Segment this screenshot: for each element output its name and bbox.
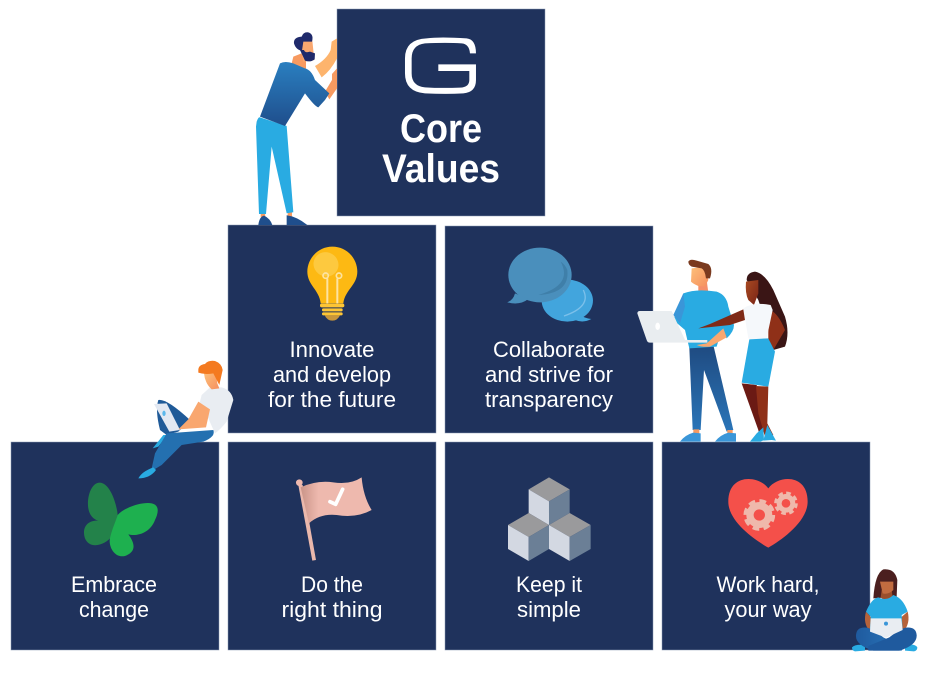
label <box>71 572 157 622</box>
label: Collaborate <box>493 337 605 362</box>
label: and strive for <box>485 362 613 387</box>
icon: cubes <box>508 477 591 561</box>
label: Embrace <box>71 572 157 597</box>
icon: heart with gears <box>728 479 808 548</box>
label: right thing <box>282 597 382 622</box>
panel: Embrace change <box>11 442 219 650</box>
icon: speech bubbles <box>507 248 593 322</box>
icon: G logo <box>405 37 476 94</box>
heading: Core Values: Values <box>382 147 500 191</box>
panel: Core Values <box>337 9 545 216</box>
figure: standing couple with laptop <box>637 260 787 442</box>
panel: Collaborate and strive for transparency <box>445 226 653 433</box>
icon: butterfly <box>84 483 158 556</box>
figure: man pushing block <box>256 32 337 225</box>
label: transparency <box>485 387 614 412</box>
figure: woman sitting cross-legged with laptop <box>852 569 917 651</box>
heading: Core Values <box>382 107 500 191</box>
heading: Core Values: Core <box>400 107 482 151</box>
label: Keep it <box>516 572 583 597</box>
icon: flag with check <box>296 477 372 561</box>
label: for the future <box>268 387 396 412</box>
panel: Do the right thing <box>228 442 436 650</box>
icon: light bulb <box>307 247 357 321</box>
label <box>716 572 820 622</box>
panel: Keep it simple <box>445 442 653 650</box>
label <box>516 572 583 622</box>
panel: Innovate and develop for the future <box>228 225 436 433</box>
label <box>485 337 614 412</box>
label: Innovate <box>290 337 374 362</box>
label: your way <box>724 597 812 622</box>
label: Do the <box>301 572 363 597</box>
label: Work hard, <box>716 572 820 597</box>
label: simple <box>517 597 581 622</box>
figure: man sitting with laptop <box>138 361 233 478</box>
label <box>268 337 396 412</box>
label: and develop <box>273 362 391 387</box>
label: change <box>79 597 149 622</box>
panel: Work hard, your way <box>662 442 870 650</box>
label <box>282 572 382 622</box>
